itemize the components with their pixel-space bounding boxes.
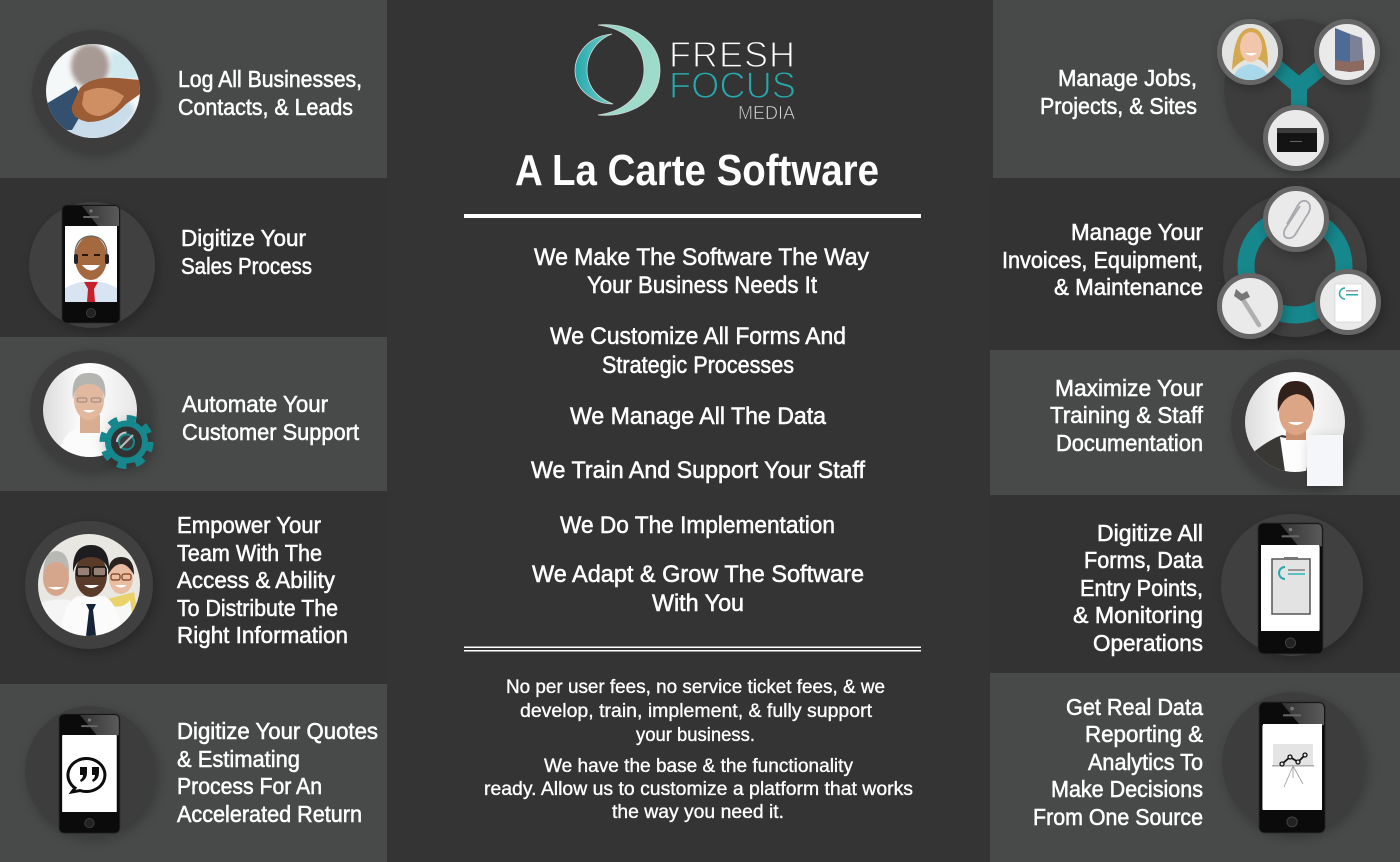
text: empower team: Access & Ability (177, 567, 335, 593)
text: empower team (177, 512, 348, 648)
text: empower team: Team With The (177, 540, 322, 566)
text: digitize forms: Entry Points, (1080, 575, 1203, 601)
icon: gear (103, 418, 150, 466)
logo mark (575, 25, 660, 115)
text: digitize quotes: Accelerated Return (177, 801, 362, 827)
text: empower team: To Distribute The (177, 595, 338, 621)
text: real data reporting: Make Decisions (1051, 776, 1203, 802)
text: value statements: We Manage All The Data (570, 403, 827, 430)
icon: phone with agent (29, 202, 155, 328)
icon: invoices equipment maintenance ring (1220, 188, 1378, 337)
text: real data reporting (1033, 694, 1203, 830)
logo: Fresh Focus Media: FOCUS (669, 65, 796, 106)
panel: digitize forms (990, 495, 1400, 673)
text: real data reporting: From One Source (1033, 804, 1203, 830)
panel: empower team (25, 516, 347, 652)
text: manage jobs (1040, 65, 1197, 119)
text: manage invoices: Manage Your (1071, 219, 1203, 245)
text: value statements: We Make The Software The Way (534, 244, 869, 271)
icon: phone with chart (1222, 692, 1364, 834)
icon: jobs projects sites hub (1220, 19, 1378, 168)
panel: digitize quotes (0, 684, 387, 862)
text: closing notes: develop, train, implement, & fully support (520, 701, 873, 722)
text: maximize training: Training & Staff (1050, 402, 1204, 428)
text: digitize quotes (177, 718, 378, 827)
text: value statements: We Train And Support Your Staff (531, 457, 865, 484)
text: automate support: Automate Your (182, 391, 328, 417)
text: digitize forms: Digitize All (1097, 520, 1203, 546)
logo: Fresh Focus Media (575, 25, 796, 123)
node: building (1316, 22, 1378, 82)
panel: maximize training (990, 350, 1400, 495)
icon: phone with clipboard (1221, 514, 1363, 656)
text: empower team: Right Information (177, 622, 348, 648)
text: closing notes: We have the base & the functionality (544, 756, 853, 777)
text: digitize forms: Forms, Data (1084, 547, 1203, 573)
text: value statements: We Do The Implementation (560, 512, 835, 539)
title: A La Carte Software (515, 146, 879, 195)
icon: handshake photo (32, 30, 154, 152)
text: closing notes: the way you need it. (612, 802, 784, 823)
text: automate support (182, 391, 360, 445)
node: document (1318, 272, 1378, 332)
panel: real data reporting (990, 673, 1400, 862)
panel: center column (464, 25, 921, 823)
text: maximize training: Documentation (1056, 430, 1203, 456)
node: software screen (1266, 108, 1326, 168)
text: closing notes: your business. (636, 725, 755, 746)
text: digitize quotes: & Estimating (177, 746, 300, 772)
icon: man with gear (30, 350, 150, 470)
text: digitize sales (181, 225, 312, 279)
text: value statements: Your Business Needs It (587, 272, 817, 299)
text: digitize quotes: Process For An (177, 773, 322, 799)
panel: automate support (0, 337, 387, 491)
text: digitize sales: Sales Process (181, 253, 312, 279)
text: digitize forms: & Monitoring (1073, 602, 1203, 628)
text: digitize sales: Digitize Your (181, 225, 306, 251)
text: value statements: Strategic Processes (602, 352, 794, 379)
text: digitize quotes: Digitize Your Quotes (177, 718, 378, 744)
text: maximize training: Maximize Your (1055, 375, 1203, 401)
node: paperclip (1266, 188, 1326, 250)
text: real data reporting: Analytics To (1088, 749, 1203, 775)
icon: phone with quote bubble (25, 706, 155, 836)
text: manage jobs: Projects, & Sites (1040, 93, 1197, 119)
text: log businesses: Contacts, & Leads (178, 94, 353, 120)
panel: manage jobs (993, 0, 1400, 178)
text: real data reporting: Get Real Data (1066, 694, 1203, 720)
text: manage invoices: & Maintenance (1054, 274, 1203, 300)
text: manage invoices (1002, 219, 1203, 300)
panel: digitize sales (0, 178, 387, 337)
text: log businesses (178, 66, 362, 120)
node: wrench (1220, 276, 1280, 336)
text: closing notes (484, 677, 913, 823)
icon: team photo (25, 521, 153, 649)
text: maximize training (1050, 375, 1204, 456)
text: log businesses: Log All Businesses, (178, 66, 362, 92)
text: closing notes: ready. Allow us to customize a platform that works (484, 779, 913, 800)
logo: Fresh Focus Media: FRESH (669, 34, 795, 75)
panel: log businesses (0, 0, 387, 178)
text: value statements: We Customize All Forms And (550, 323, 846, 350)
text: digitize forms (1073, 520, 1203, 656)
text: manage invoices: Invoices, Equipment, (1002, 247, 1203, 273)
text: real data reporting: Reporting & (1085, 721, 1203, 747)
text: digitize forms: Operations (1093, 630, 1203, 656)
logo: Fresh Focus Media: MEDIA (738, 103, 795, 123)
text: automate support: Customer Support (182, 419, 360, 445)
text: value statements: We Adapt & Grow The Software (532, 561, 864, 588)
text: value statements (531, 244, 869, 617)
text: value statements: With You (652, 590, 744, 617)
icon: paper sheet (1307, 435, 1343, 486)
text: closing notes: No per user fees, no service ticket fees, & we (506, 677, 885, 698)
panel: manage invoices (990, 178, 1400, 350)
icon: man with document (1231, 359, 1359, 487)
text: empower team: Empower Your (177, 512, 321, 538)
text: manage jobs: Manage Jobs, (1058, 65, 1197, 91)
node: woman photo (1220, 22, 1280, 82)
